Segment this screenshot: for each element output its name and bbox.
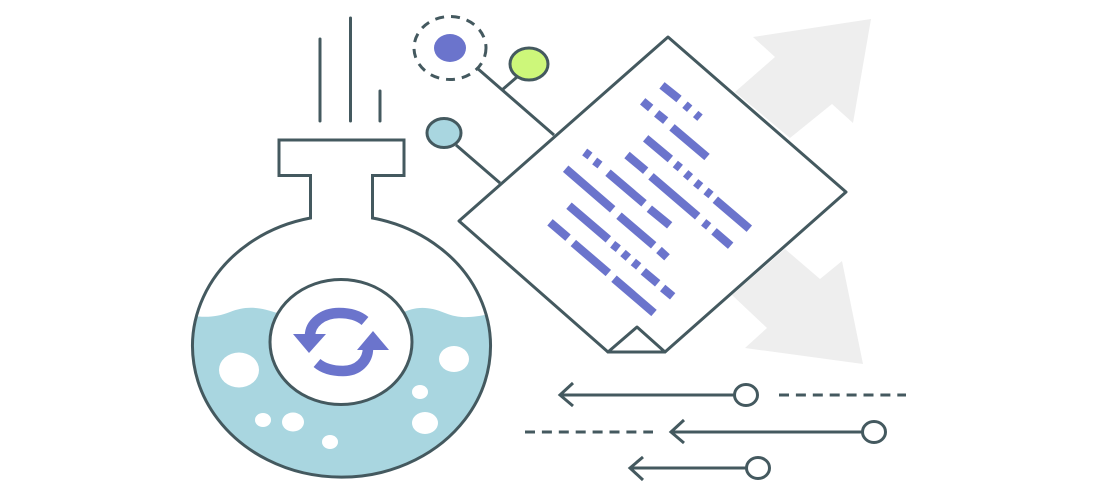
page	[459, 37, 846, 352]
arrow row 3	[630, 457, 770, 480]
background arrow: down right	[732, 249, 863, 364]
arrow row 1	[560, 383, 906, 406]
flask liquid	[185, 308, 495, 480]
connector lines	[456, 68, 554, 183]
node: green	[510, 48, 548, 80]
vapour lines	[320, 18, 380, 121]
document	[459, 37, 846, 352]
node: purple	[434, 34, 466, 62]
flask outline	[192, 140, 490, 477]
connector nodes	[414, 16, 554, 183]
icon: refresh	[293, 313, 389, 371]
arrow row 2	[525, 420, 886, 443]
inner circle	[270, 280, 412, 404]
document text bars	[550, 85, 749, 313]
dashed node	[414, 16, 486, 80]
background arrow: up right	[735, 19, 871, 138]
illustration	[190, 15, 906, 482]
flask	[185, 140, 495, 480]
node: blue	[427, 118, 461, 148]
page fold	[608, 327, 665, 352]
bubbles	[219, 346, 469, 449]
